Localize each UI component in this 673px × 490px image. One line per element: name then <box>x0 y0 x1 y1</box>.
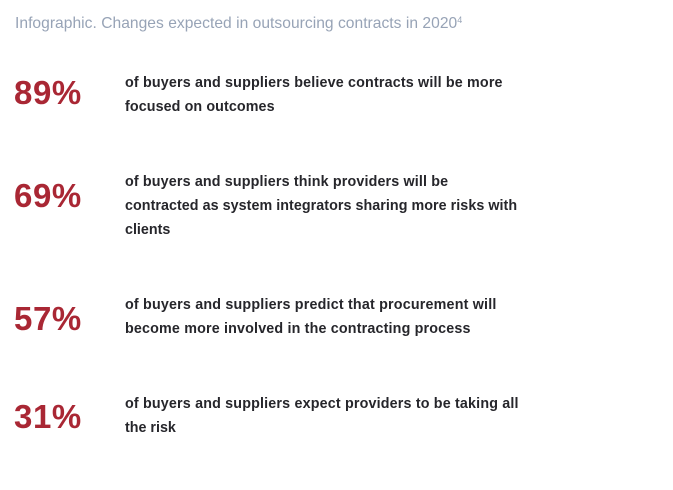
text: 57% description <box>125 297 497 337</box>
text: 69% description: clients <box>125 222 170 238</box>
text: 57% description: of buyers and suppliers predict that procurement will <box>125 297 497 313</box>
stat: 69%: 69% <box>14 177 82 214</box>
text: 89% description <box>125 75 503 115</box>
title: Infographic. Changes expected in outsourcing contracts in 20204 <box>15 15 462 32</box>
text: 31% description: the risk <box>125 420 176 436</box>
text: 57% description: become more involved in the contracting process <box>125 321 471 337</box>
stat: 31%: 31% <box>14 398 82 435</box>
text: 31% description: of buyers and suppliers expect providers to be taking all <box>125 396 519 412</box>
stat: 57%: 57% <box>14 300 82 337</box>
text: 31% description <box>125 396 519 436</box>
stat: 89%: 89% <box>14 74 82 111</box>
text: 69% description <box>125 174 517 238</box>
text: 69% description: contracted as system integrators sharing more risks with <box>125 198 517 214</box>
text: 69% description: of buyers and suppliers think providers will be <box>125 174 448 190</box>
text: 89% description: focused on outcomes <box>125 99 275 115</box>
text: 89% description: of buyers and suppliers believe contracts will be more <box>125 75 503 91</box>
